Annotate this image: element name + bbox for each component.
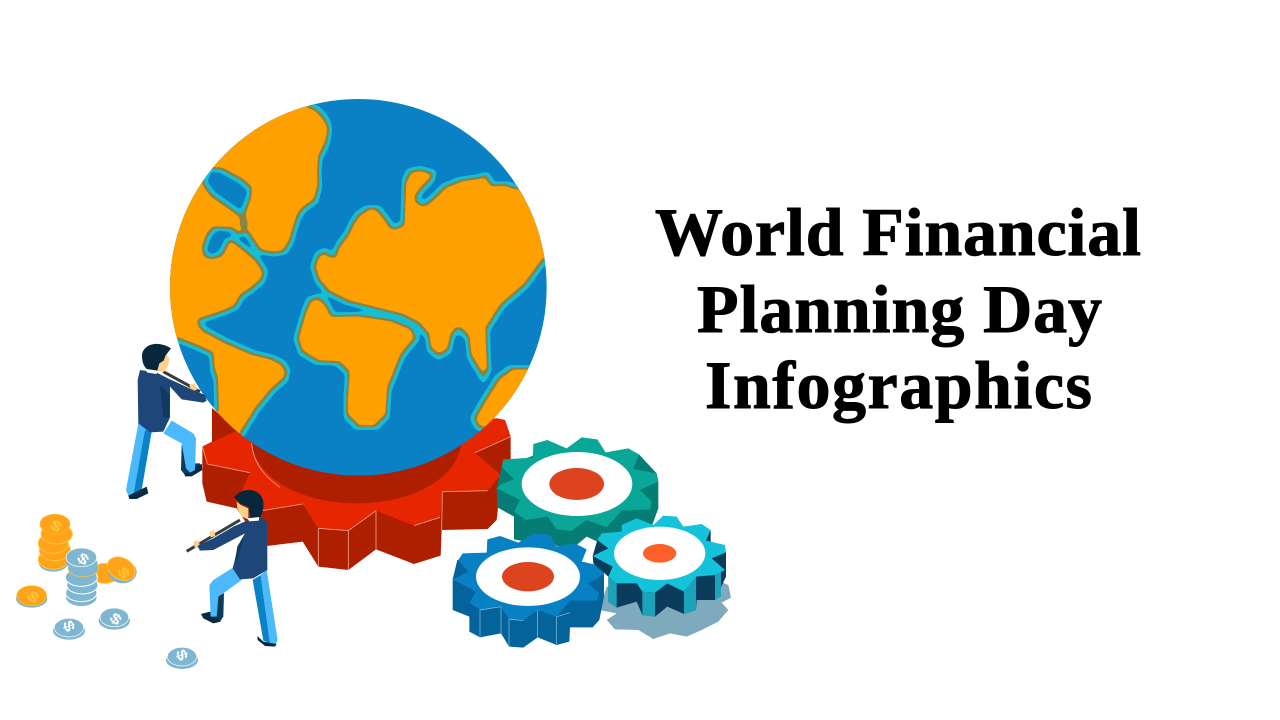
figure: man pushing globe <box>126 344 207 499</box>
title <box>655 194 1141 423</box>
blue gear <box>453 533 604 648</box>
single blue coin <box>166 647 198 669</box>
single orange coin <box>16 586 47 608</box>
single blue coin: $ <box>106 609 125 629</box>
single blue coin: $ <box>59 618 78 634</box>
title: Infographics <box>705 347 1092 423</box>
title: World Financial <box>655 194 1141 270</box>
coin stack: orange <box>38 514 72 572</box>
infographic canvas <box>16 99 1140 669</box>
single blue coin: $ <box>172 647 191 663</box>
single orange coin: $ <box>24 587 43 607</box>
shadow of cyan gear <box>599 580 731 639</box>
single blue coin <box>53 618 85 640</box>
coins <box>16 514 198 669</box>
coin stack: blue: $ <box>74 549 93 569</box>
globe <box>170 99 547 476</box>
cyan gear <box>593 516 726 617</box>
tilted orange coins <box>91 552 139 585</box>
coin stack: orange: $ <box>47 516 65 536</box>
figure: man with pole <box>187 490 278 647</box>
coin stack: blue <box>65 548 99 606</box>
red gear <box>202 408 511 570</box>
single blue coin <box>99 608 130 630</box>
tilted orange coins: $ <box>114 564 133 582</box>
title: Planning Day <box>697 271 1102 347</box>
teal gear <box>497 437 658 548</box>
